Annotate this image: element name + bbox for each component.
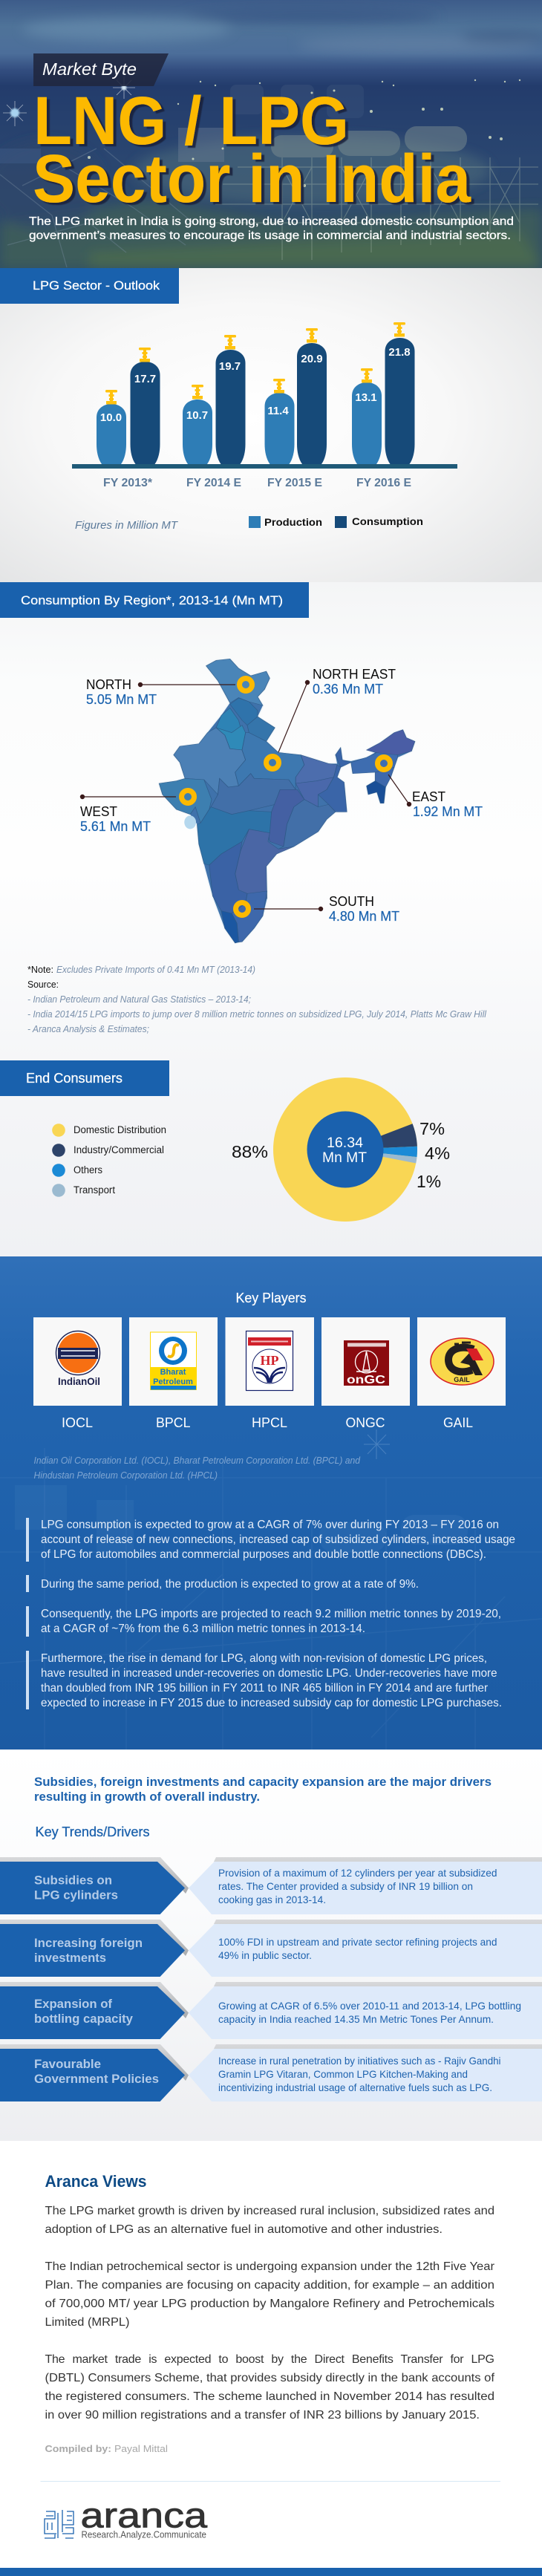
views paragraph 2: Plan. The companies are focusing on capacity addition, for example – an addition: [45, 2279, 494, 2292]
cylinder FY2014 consumption 19.7: [215, 335, 245, 464]
heading: Key Players: Key Players: [236, 1291, 306, 1305]
logo: aranca: [45, 2495, 208, 2540]
row: government policies: Gramin LPG Vitaran, Common LPG Kitchen-Making and: [218, 2068, 468, 2080]
donut percentages: 4%: [425, 1144, 450, 1163]
cylinder FY2016 consumption 21.8: [385, 322, 414, 464]
row: foreign investments: 49% in public sector.: [218, 1949, 312, 1961]
paragraph: production growth: During the same period, the production is expected to grow at a rate of 9%.: [41, 1578, 419, 1591]
card: IOCL: [33, 1317, 122, 1430]
label: north: [86, 677, 157, 707]
views paragraph 3: (DBTL) Consumers Scheme, that provides subsidy directly in the bank accounts of: [45, 2372, 495, 2384]
chart legend: Consumption: [352, 515, 423, 527]
heading: Key Trends/Drivers: Key Trends/Drivers: [36, 1825, 149, 1839]
label: south: 4.80 Mn MT: [329, 909, 399, 924]
panel: outlook background: [0, 268, 542, 582]
x axis labels: FY 2014 E: [186, 477, 241, 489]
cylinder FY2013 consumption 17.7: 17.7: [134, 373, 156, 385]
icon: aranca mark: [45, 2510, 74, 2538]
label: east: 1.92 Mn MT: [413, 804, 483, 819]
icon: IndianOil logo: IndianOil: [58, 1375, 100, 1387]
paragraph: imports: Consequently, the LPG imports are projected to reach 9.2 million metric tonnes by 2019-20,: [41, 1608, 501, 1620]
cylinder FY2014 consumption 19.7: 19.7: [219, 360, 241, 373]
label: south: SOUTH: [329, 894, 374, 909]
paragraph: imports: at a CAGR of ~7% from the 6.3 million metric tonnes in 2013-14.: [41, 1623, 365, 1635]
views paragraph 1: adoption of LPG as an alternative fuel in automotive and other industries.: [45, 2223, 443, 2236]
label: west: [80, 804, 151, 834]
drivers headline: resulting in growth of overall industry.: [34, 1790, 260, 1804]
icon: HP logo: [246, 1331, 293, 1390]
row: bottling capacity: capacity in India reached 14.35 Mn Metric Tones Per Annum.: [218, 2013, 494, 2025]
subtitle: The LPG market in India is going strong, due to increased domestic consumption and: [29, 215, 514, 228]
title: Sector in India: [33, 141, 471, 217]
label: north: 5.05 Mn MT: [86, 692, 157, 707]
chart legend: [249, 515, 423, 528]
icon: GAIL logo: GAIL: [454, 1376, 470, 1383]
card: BPCL: BPCL: [156, 1415, 190, 1430]
heading: consumption by region: Consumption By Region*, 2013-14 (Mn MT): [21, 593, 283, 607]
heading: LPG Sector - Outlook: [0, 268, 179, 304]
map rings: [181, 679, 391, 915]
map: India: [159, 659, 415, 943]
paragraph: under-recoveries: [26, 1651, 502, 1709]
key players footnote: Hindustan Petroleum Corporation Ltd. (HPCL): [34, 1470, 218, 1481]
card: HPCL: [226, 1317, 314, 1430]
notes and sources: - Indian Petroleum and Natural Gas Statistics – 2013-14;: [27, 994, 251, 1005]
cylinder FY2013 production 10.0: [97, 390, 126, 464]
views paragraph 3: in over 90 million registrations and a transfer of INR 23 billions by January 2015.: [45, 2409, 480, 2422]
notes and sources: - Aranca Analysis & Estimates;: [27, 1023, 149, 1034]
paragraph: imports: [26, 1606, 501, 1637]
row: government policies: Increase in rural penetration by initiatives such as - Rajiv Gandhi: [218, 2055, 500, 2067]
x axis labels: [103, 477, 411, 489]
donut legend: Others: [74, 1164, 102, 1175]
views paragraph 3: the registered consumers. The scheme launched in November 2014 has resulted: [45, 2390, 494, 2403]
panel: Aranca Views background: [0, 2141, 542, 2568]
drivers headline: Subsidies, foreign investments and capacity expansion are the major drivers: [34, 1775, 492, 1789]
icon: ONGC logo: onGC: [347, 1374, 386, 1386]
cylinder FY2013 consumption 17.7: [131, 348, 160, 464]
icon: ONGC logo: [344, 1340, 389, 1386]
row: government policies: [0, 2044, 542, 2101]
paragraph: consumption growth: account of release of new connections, increased cap of subsidized cylinders, increased usage: [41, 1533, 515, 1546]
row: government policies: Government Policies: [34, 2072, 159, 2086]
row: subsidies: Provision of a maximum of 12 cylinders per year at subsidized: [218, 1867, 497, 1879]
notes and sources: Excludes Private Imports of 0.41 Mn MT (2013-14): [56, 964, 255, 975]
heading: End Consumers: End Consumers: [26, 1071, 123, 1086]
badge: Market Byte: Market Byte: [42, 59, 137, 79]
row: foreign investments: Increasing foreign: [34, 1936, 143, 1950]
views paragraph 3: The market trade is expected to boost by the Direct Benefits Transfer for LPG: [45, 2353, 494, 2366]
donut legend: Transport: [74, 1184, 115, 1196]
icon: IndianOil logo: [56, 1331, 100, 1387]
donut percentages: 7%: [419, 1119, 445, 1138]
subtitle: [29, 215, 514, 242]
label: north east: NORTH EAST: [313, 667, 396, 682]
footer bar: [0, 2568, 542, 2576]
label: north east: [313, 667, 396, 697]
row: subsidies: rates. The Center provided a subsidy of INR 19 billion on: [218, 1880, 473, 1892]
card: BPCL: [129, 1317, 218, 1430]
icon: HP logo: HP: [260, 1353, 279, 1368]
icon: Bharat Petroleum logo: Petroleum: [153, 1377, 193, 1386]
icon: Bharat Petroleum logo: [150, 1332, 196, 1390]
donut chart: 16.34: [327, 1135, 363, 1151]
paragraph: consumption growth: [26, 1518, 515, 1562]
donut chart: Mn MT: [322, 1150, 367, 1166]
card: GAIL: [417, 1317, 506, 1430]
key players footnote: [34, 1455, 361, 1481]
card: GAIL: GAIL: [443, 1415, 473, 1430]
views paragraph 2: Limited (MRPL): [45, 2316, 129, 2329]
cylinder FY2016 consumption 21.8: 21.8: [388, 346, 411, 359]
subtitle: government’s measures to encourage its usage in commercial and industrial sectors.: [29, 229, 511, 242]
chart: cylinder bars: [72, 322, 457, 489]
compiled by credit: Compiled by:: [45, 2443, 111, 2454]
panel: key players background: [0, 1256, 542, 1750]
label: east: EAST: [412, 789, 445, 804]
paragraph: under-recoveries: have resulted in increased under-recoveries on domestic LPG. Under-recoveries have more: [41, 1667, 497, 1680]
cylinder FY2015 production 11.4: 11.4: [267, 405, 289, 417]
donut legend: [52, 1124, 166, 1197]
drivers headline: [34, 1775, 492, 1804]
cylinder FY2015 consumption 20.9: [297, 328, 327, 464]
donut percentages: [232, 1119, 450, 1191]
card: ONGC: [321, 1317, 410, 1430]
donut chart: [232, 1077, 450, 1222]
row: government policies: Favourable: [34, 2057, 101, 2071]
donut legend: Domestic Distribution: [74, 1124, 166, 1135]
paragraph: consumption growth: of LPG for automobiles and commercial purposes and double bottle connections (DBCs).: [41, 1548, 486, 1561]
row: bottling capacity: bottling capacity: [34, 2012, 134, 2026]
notes and sources: Source:: [27, 979, 59, 990]
heading: End Consumers: [0, 1060, 169, 1096]
icon: Bharat Petroleum logo: Bharat: [160, 1368, 186, 1377]
logo: aranca: aranca: [80, 2495, 208, 2535]
row: government policies: incentivizing industrial usage of alternative fuels such as LPG.: [218, 2081, 492, 2093]
paragraph: under-recoveries: expected to increase in FY 2015 due to increased subsidy cap for domestic LPG purchases.: [41, 1697, 502, 1709]
views paragraph 2: of 700,000 MT/ year LPG production by Mangalore Refinery and Petrochemicals: [45, 2298, 494, 2310]
icon: GAIL logo: [431, 1338, 494, 1385]
compiled by credit: [45, 2443, 168, 2454]
donut percentages: 1%: [417, 1172, 441, 1191]
paragraph: under-recoveries: than doubled from INR 195 billion in FY 2011 to INR 465 billion in FY 2014 and are further: [41, 1682, 489, 1695]
x axis labels: FY 2015 E: [267, 477, 322, 489]
row: bottling capacity: [0, 1982, 542, 2039]
heading: consumption by region: [0, 582, 309, 618]
row: subsidies: Subsidies on: [34, 1873, 112, 1888]
paragraph: under-recoveries: Furthermore, the rise in demand for LPG, along with non-revision of domestic LPG prices,: [41, 1652, 487, 1665]
card: HPCL: HPCL: [252, 1415, 287, 1430]
views paragraph 2: [45, 2260, 495, 2329]
panel: region and end consumers background: [0, 582, 542, 1256]
row: subsidies: LPG cylinders: [34, 1888, 118, 1902]
hero photo background: [0, 0, 542, 268]
row: subsidies: [0, 1857, 542, 1914]
cylinder FY2016 production 13.1: 13.1: [355, 391, 377, 404]
x axis labels: FY 2013*: [103, 477, 153, 489]
label: east: [412, 789, 483, 819]
cylinder FY2016 production 13.1: [352, 368, 382, 464]
views paragraph 1: The LPG market growth is driven by increased rural inclusion, subsidized rates and: [45, 2205, 494, 2217]
notes and sources: [27, 964, 487, 1034]
notes and sources: *Note:: [27, 964, 53, 975]
views paragraph 2: The Indian petrochemical sector is undergoing expansion under the 12th Five Year: [45, 2260, 495, 2273]
paragraph: production growth: [26, 1575, 419, 1592]
row: foreign investments: 100% FDI in upstream and private sector refining projects and: [218, 1936, 497, 1948]
row: foreign investments: [0, 1920, 542, 1977]
row: foreign investments: investments: [34, 1951, 106, 1965]
panel: drivers background: [0, 1750, 542, 2141]
compiled by credit: Payal Mittal: [114, 2443, 168, 2454]
cylinder FY2014 production 10.7: 10.7: [186, 409, 208, 422]
row: bottling capacity: Expansion of: [34, 1997, 112, 2011]
badge: Market Byte: [33, 53, 169, 86]
card: ONGC: ONGC: [346, 1415, 385, 1430]
card: IOCL: IOCL: [62, 1415, 93, 1430]
title: LNG / LPG: [33, 83, 349, 159]
views paragraph 1: [45, 2205, 494, 2236]
units note: Figures in Million MT: [75, 519, 179, 532]
heading: Aranca Views: Aranca Views: [45, 2172, 147, 2191]
views paragraph 3: [45, 2353, 495, 2422]
key players footnote: Indian Oil Corporation Ltd. (IOCL), Bharat Petroleum Corporation Ltd. (BPCL) and: [34, 1455, 361, 1466]
cylinder FY2015 consumption 20.9: 20.9: [301, 353, 323, 365]
row: subsidies: cooking gas in 2013-14.: [218, 1894, 326, 1905]
heading: LPG Sector - Outlook: LPG Sector - Outlook: [33, 278, 160, 293]
cylinder FY2014 production 10.7: [183, 385, 212, 464]
x axis labels: FY 2016 E: [356, 477, 411, 489]
chart legend: Production: [264, 516, 322, 528]
cylinder FY2015 production 11.4: [264, 379, 294, 464]
leader lines and dots: [80, 680, 411, 911]
logo: aranca: Research.Analyze.Communicate: [82, 2529, 206, 2540]
donut percentages: 88%: [232, 1142, 268, 1161]
paragraph: consumption growth: LPG consumption is expected to grow at a CAGR of 7% over during FY 2013 – FY 2016 on: [41, 1519, 499, 1531]
donut legend: Industry/Commercial: [74, 1144, 164, 1155]
cylinder FY2013 production 10.0: 10.0: [100, 411, 122, 424]
row: bottling capacity: Growing at CAGR of 6.5% over 2010-11 and 2013-14, LPG bottling: [218, 2000, 521, 2012]
label: north east: 0.36 Mn MT: [313, 682, 383, 697]
title: [33, 83, 471, 217]
label: west: 5.61 Mn MT: [80, 819, 151, 834]
notes and sources: - India 2014/15 LPG imports to jump over 8 million metric tonnes on subsidized LPG, July 2014, Platts Mc Graw Hill: [27, 1008, 487, 1020]
label: west: WEST: [80, 804, 117, 819]
label: south: [329, 894, 399, 924]
label: north: NORTH: [86, 677, 131, 692]
